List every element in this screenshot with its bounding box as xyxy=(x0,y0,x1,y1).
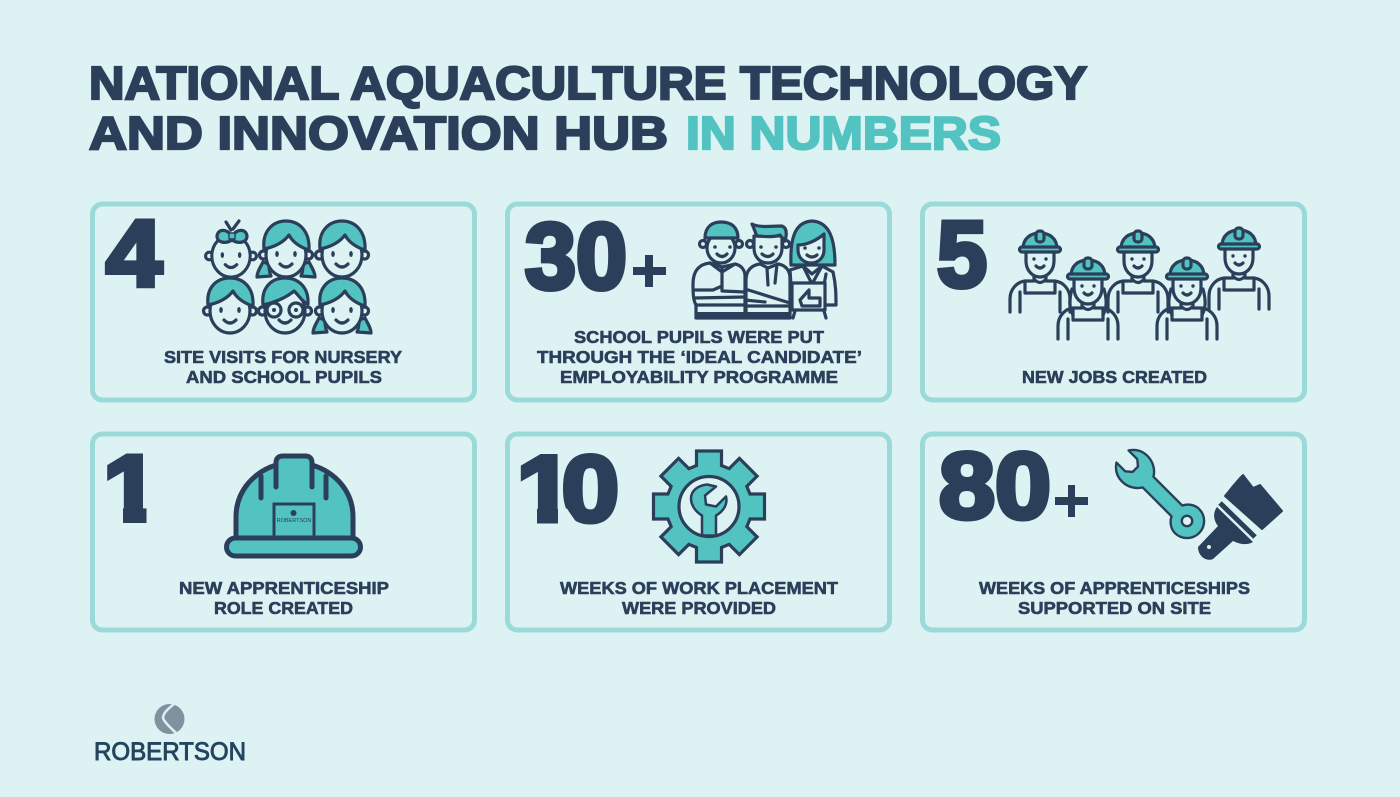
label: WEEKS OF WORK PLACEMENT xyxy=(560,578,838,598)
woman xyxy=(790,221,836,318)
label: AND SCHOOL PUPILS xyxy=(186,367,382,387)
label xyxy=(979,578,1250,618)
number: 4: 4 xyxy=(106,200,162,306)
label: SCHOOL PUPILS WERE PUT xyxy=(574,327,824,347)
icon: five construction workers xyxy=(1010,228,1269,339)
number: 10: 10 xyxy=(516,436,619,541)
man with hard hat xyxy=(693,222,745,318)
label xyxy=(179,578,389,618)
number: 80+: 80 xyxy=(939,433,1051,538)
logo: Robertson: ROBERTSON xyxy=(94,738,246,766)
worker with side hair xyxy=(1058,258,1118,339)
panel: apprenticeship xyxy=(92,434,474,630)
label: EMPLOYABILITY PROGRAMME xyxy=(560,367,838,387)
label: SUPPORTED ON SITE xyxy=(1018,598,1211,618)
label: WERE PROVIDED xyxy=(622,598,776,618)
label: SITE VISITS FOR NURSERY xyxy=(164,347,402,367)
icon: hard hat: ROBERTSON xyxy=(277,518,311,524)
label: NEW JOBS CREATED xyxy=(1022,367,1207,387)
icon: three workers xyxy=(693,221,836,318)
icon: gear with wrench xyxy=(654,451,764,562)
label xyxy=(537,327,862,387)
icon: six children faces xyxy=(204,221,371,333)
title: AND INNOVATION HUB xyxy=(89,107,668,159)
panel: school pupils xyxy=(508,204,890,400)
title xyxy=(89,57,1087,159)
label: THROUGH THE ‘IDEAL CANDIDATE’ xyxy=(537,347,862,367)
label: NEW APPRENTICESHIP xyxy=(179,578,389,598)
label xyxy=(560,578,838,618)
number: 30+: 30 xyxy=(525,204,627,308)
worker with side hair xyxy=(1157,258,1217,339)
panel: site visits xyxy=(92,200,474,400)
logo: Robertson xyxy=(94,704,246,766)
title: NATIONAL AQUACULTURE TECHNOLOGY xyxy=(89,57,1087,109)
label xyxy=(164,347,402,387)
title: IN NUMBERS xyxy=(686,107,1001,159)
panel: work placement xyxy=(508,434,890,630)
man with quiff xyxy=(745,224,790,318)
icon: paint brush xyxy=(1198,475,1282,560)
icon: wrench xyxy=(1110,444,1212,546)
number: 5: 5 xyxy=(937,202,987,306)
label: ROLE CREATED xyxy=(214,598,353,618)
number: 1: 1 xyxy=(103,436,159,540)
label: WEEKS OF APPRENTICESHIPS xyxy=(979,578,1250,598)
panel: apprenticeships supported xyxy=(922,433,1304,630)
icon: hard hat xyxy=(226,456,360,556)
panel: new jobs xyxy=(922,202,1304,400)
